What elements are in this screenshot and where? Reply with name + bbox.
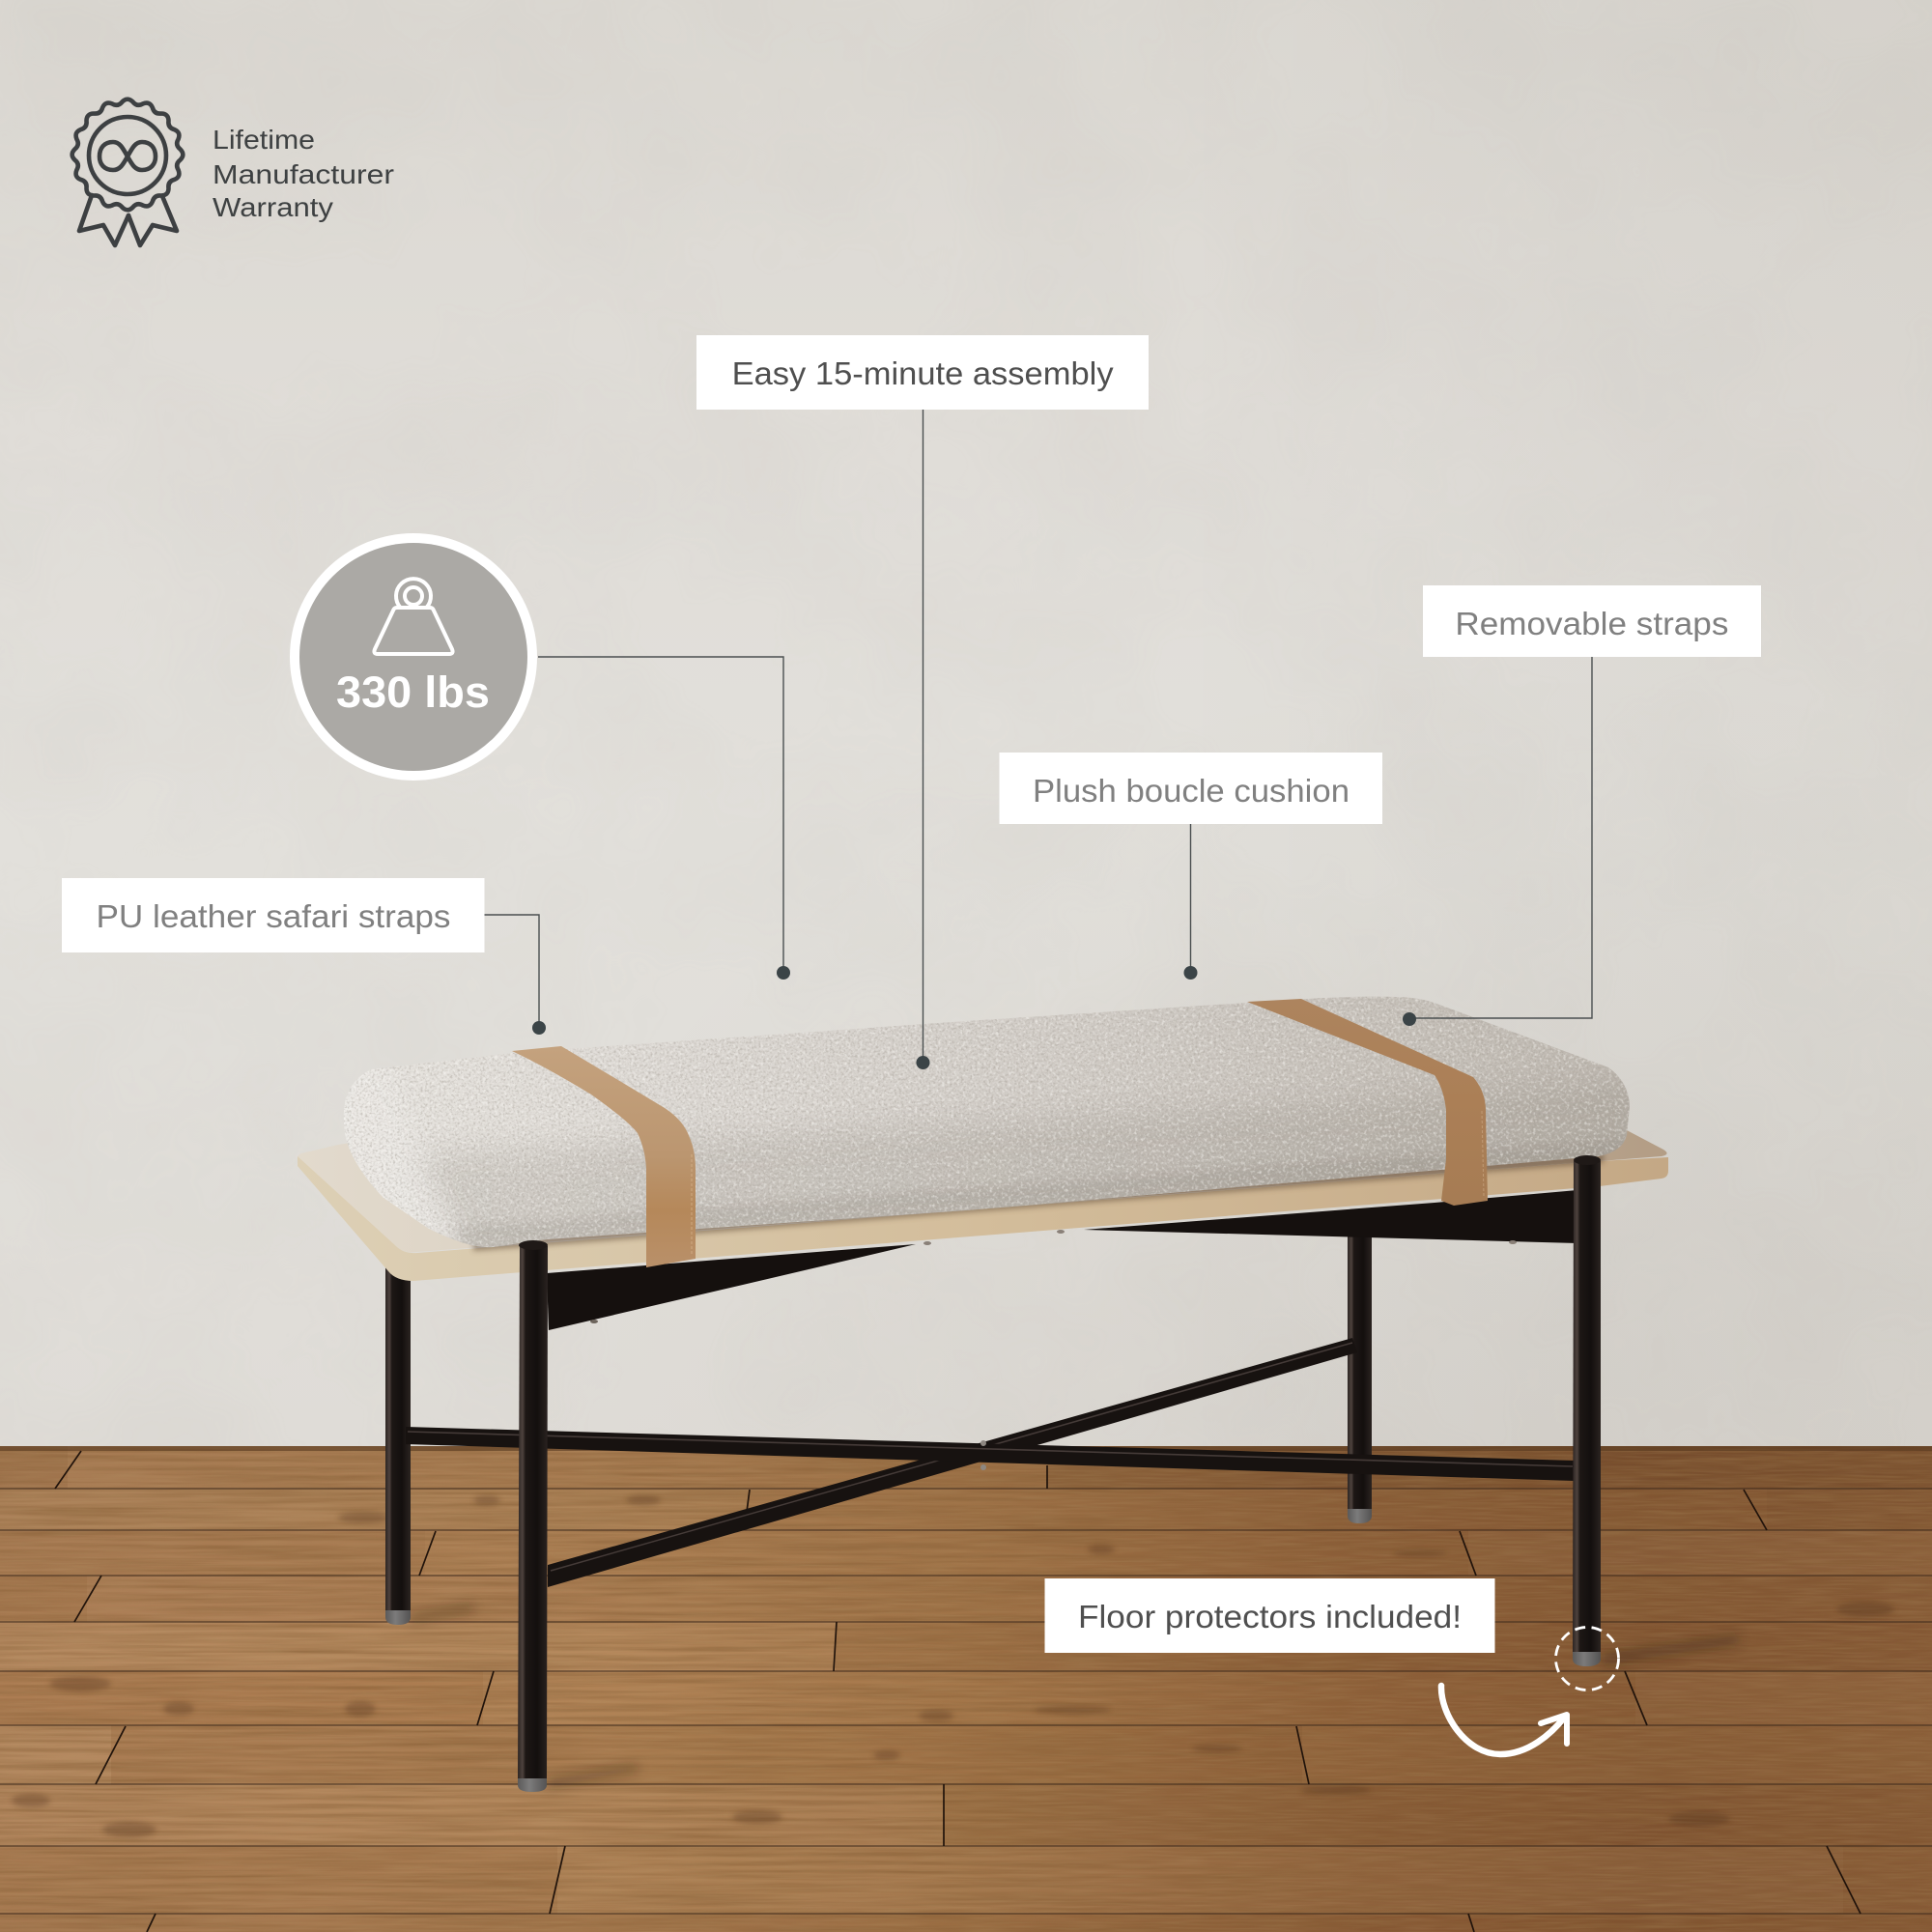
front right leg [1573,1155,1601,1666]
back right leg [1348,1232,1372,1523]
icon: weight [374,579,453,654]
dashed highlight circle [1555,1627,1619,1690]
bench [298,985,1668,1792]
callout: leather straps [62,878,546,1035]
black under-seat braces [547,1190,1577,1330]
callout: removable straps [1403,585,1761,1026]
wooden seat board [298,1063,1668,1281]
boucle cushion [328,985,1642,1261]
callout: weight capacity [290,533,790,980]
background: plaster wall [0,0,1932,1449]
warranty text [213,125,394,222]
callout: plush cushion [999,753,1382,980]
callout: floor protectors [1045,1578,1619,1754]
warranty badge [72,99,394,245]
weight label: 330 lbs [336,668,490,717]
back left leg [385,1261,411,1625]
callout: assembly [696,335,1149,1069]
icon: rosette with infinity symbol [72,99,183,245]
warranty text: Warranty [213,192,333,222]
diagonal cross bar [548,1338,1357,1587]
left leather strap [512,1046,696,1267]
front left leg [518,1240,548,1792]
callout: plush cushion: Plush boucle cushion [1033,773,1350,809]
wood plank floor [0,1446,1932,1932]
right leather strap [1247,999,1488,1206]
callout: removable straps: Removable straps [1455,606,1728,641]
callout: floor protectors: Floor protectors included! [1078,1599,1462,1634]
warranty text: Manufacturer [213,159,394,189]
callout: leather straps: PU leather safari straps [97,898,450,934]
long stretcher bar [406,1427,1575,1481]
warranty text: Lifetime [213,125,315,155]
arrow: curved pointer [1441,1686,1567,1754]
callout: assembly: Easy 15-minute assembly [732,355,1114,391]
